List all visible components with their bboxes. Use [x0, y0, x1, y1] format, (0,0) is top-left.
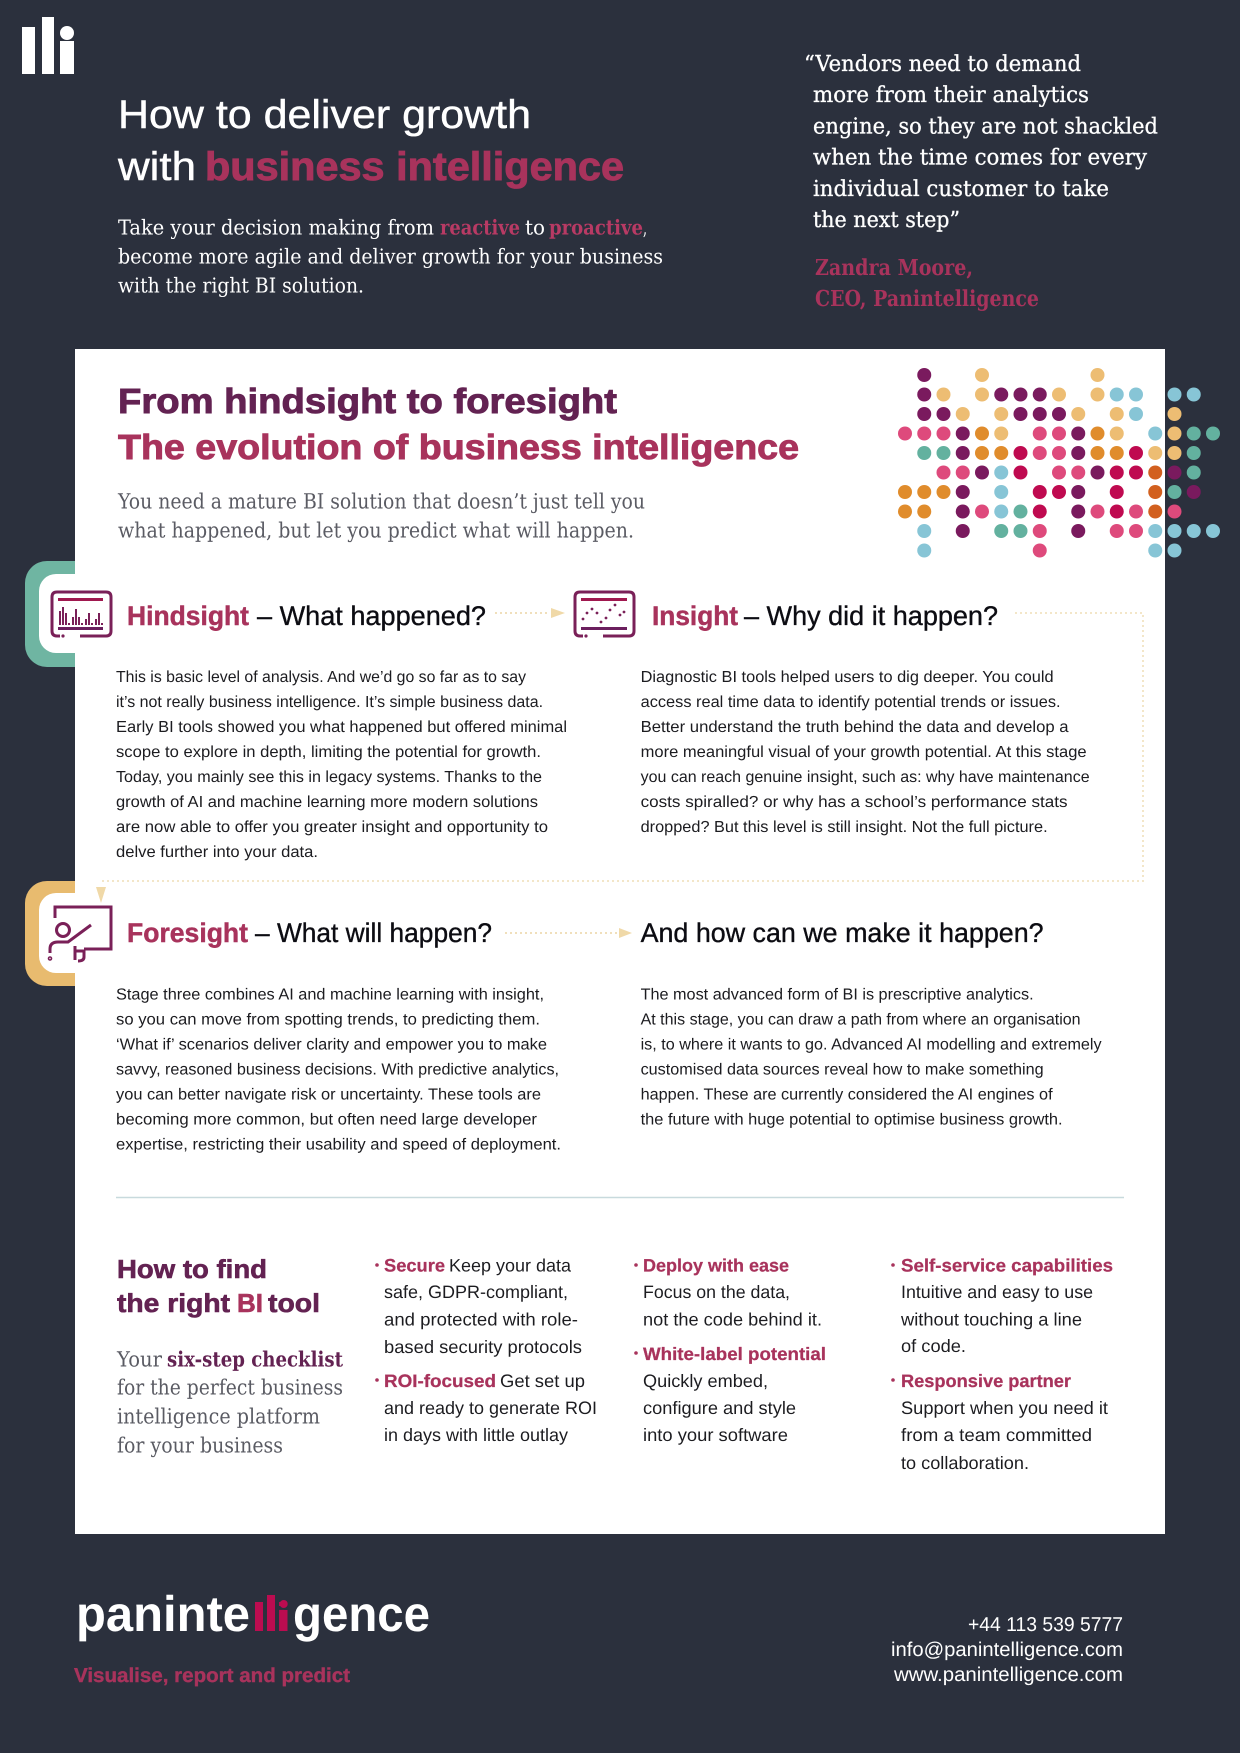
checklist: secure and ROI-focused — [375, 1256, 597, 1445]
tab: yellow foresight — [25, 881, 109, 986]
section intro: You need a mature BI solution that doesn’t just tell you — [117, 490, 645, 514]
icon: foresight presenter at board — [49, 907, 111, 961]
checklist: deploy with ease and white-label: Deploy with ease — [643, 1256, 789, 1276]
heading: hindsight: Hindsight — [127, 601, 249, 631]
text block: prescriptive: is, to where it wants to go. Advanced AI modelling and extremely — [641, 1036, 1102, 1054]
text block: hindsight: This is basic level of analysis. And we’d go so far as to say — [116, 669, 526, 686]
text block: foresight: savvy, reasoned business decisions. With predictive analytics, — [116, 1062, 559, 1078]
checklist: secure and ROI-focused: in days with little outlay — [384, 1425, 568, 1445]
checklist: self-service and responsive partner: Support when you need it — [901, 1398, 1108, 1418]
header intro text: , — [643, 216, 647, 240]
checklist: secure and ROI-focused: Secure — [384, 1256, 445, 1276]
text block: hindsight: it’s not really business intelligence. It’s simple business data. — [116, 694, 543, 711]
pull quote: the next step” — [813, 208, 960, 233]
text block: foresight: Stage three combines AI and machine learning with insight, — [116, 986, 544, 1004]
checklist: self-service and responsive partner: without touching a line — [900, 1310, 1082, 1330]
arrow: foresight to prescriptive — [505, 928, 632, 938]
quote attribution — [815, 255, 1039, 312]
text block: foresight: so you can move from spotting trends, to predicting them. — [116, 1012, 540, 1028]
pull quote: when the time comes for every — [813, 146, 1148, 170]
heading: how to find the right BI tool: the right — [117, 1288, 230, 1318]
checklist intro: six-step checklist — [167, 1346, 343, 1372]
checklist: self-service and responsive partner: Responsive partner — [901, 1371, 1071, 1391]
header intro text: proactive — [549, 216, 643, 240]
header title: with — [117, 145, 196, 189]
footer contact details: www.panintelligence.com — [893, 1664, 1123, 1686]
text block: prescriptive: customised data sources reveal how to make something — [641, 1062, 1044, 1078]
footer logo: panintelligence: paninte — [76, 1586, 250, 1642]
dot matrix graphic — [898, 368, 1220, 558]
text block: prescriptive: the future with huge potential to optimise business growth. — [641, 1112, 1063, 1128]
text block: hindsight: delve further into your data. — [116, 844, 318, 861]
heading: hindsight: – What happened? — [257, 601, 486, 631]
section heading: From hindsight to foresight — [118, 382, 617, 421]
text block: foresight: you can better navigate risk or uncertainty. These tools are — [116, 1086, 541, 1104]
section intro: what happened, but let you predict what will happen. — [118, 518, 634, 542]
header intro text: become more agile and deliver growth for your business — [118, 244, 663, 268]
header intro text — [118, 216, 663, 298]
heading: hindsight — [127, 601, 486, 631]
footer logo: panintelligence: lli — [255, 1596, 287, 1640]
checklist: self-service and responsive partner: to collaboration. — [901, 1453, 1029, 1473]
text block: insight: dropped? But this level is still insight. Not the full picture. — [641, 819, 1048, 836]
checklist: secure and ROI-focused: Get set up — [500, 1371, 585, 1391]
text block: foresight: ‘What if’ scenarios deliver clarity and empower you to make — [116, 1036, 547, 1054]
heading: insight: Insight — [652, 601, 738, 631]
footer logo: panintelligence: gence — [293, 1586, 430, 1642]
text block: insight — [641, 669, 1090, 836]
text block: prescriptive — [641, 986, 1102, 1128]
text block: foresight: expertise, restricting their usability and speed of deployment. — [116, 1136, 561, 1154]
heading: and how can we make it happen: And how can we make it happen? — [641, 918, 1044, 948]
checklist intro: Your — [116, 1348, 163, 1372]
text block: foresight — [116, 986, 561, 1154]
pull quote: more from their analytics — [813, 83, 1089, 108]
text block: hindsight: Today, you mainly see this in legacy systems. Thanks to the — [116, 769, 542, 786]
tab: green hindsight — [25, 561, 109, 667]
checklist intro — [116, 1346, 343, 1458]
quote attribution: CEO, Panintelligence — [815, 286, 1039, 312]
pull quote: individual customer to take — [813, 177, 1109, 202]
header intro text: reactive — [440, 216, 520, 240]
checklist: deploy with ease and white-label: into your software — [643, 1425, 788, 1445]
section heading — [118, 382, 799, 467]
header intro text: Take your decision making from — [118, 216, 434, 240]
heading: foresight: Foresight — [127, 918, 248, 948]
text block: hindsight: growth of AI and machine learning more modern solutions — [116, 794, 538, 811]
checklist intro: intelligence platform — [117, 1404, 320, 1428]
pull quote — [804, 52, 1158, 233]
footer contact details: info@panintelligence.com — [891, 1639, 1123, 1661]
text block: hindsight — [116, 669, 567, 861]
header title — [117, 93, 624, 189]
checklist: self-service and responsive partner: from a team committed — [901, 1425, 1092, 1445]
checklist: secure and ROI-focused: ROI-focused — [384, 1371, 496, 1391]
checklist: deploy with ease and white-label — [634, 1256, 826, 1445]
checklist: secure and ROI-focused: and ready to generate ROI — [384, 1398, 597, 1418]
footer contact details — [891, 1614, 1123, 1686]
icon: insight scatter monitor — [575, 592, 634, 638]
checklist: secure and ROI-focused: based security protocols — [384, 1337, 582, 1357]
section heading: The evolution of business intelligence — [118, 428, 799, 467]
checklist: deploy with ease and white-label: configure and style — [643, 1398, 796, 1418]
text block: insight: Diagnostic BI tools helped users to dig deeper. You could — [641, 669, 1054, 686]
checklist: secure and ROI-focused: safe, GDPR-compliant, — [384, 1282, 568, 1302]
checklist intro: for your business — [117, 1434, 283, 1458]
heading: how to find the right BI tool: BI — [237, 1288, 263, 1318]
footer logo: panintelligence — [76, 1586, 430, 1642]
header title: How to deliver growth — [118, 93, 531, 137]
header intro text: to — [525, 216, 545, 240]
checklist: self-service and responsive partner: Self-service capabilities — [901, 1256, 1113, 1276]
heading: foresight — [127, 918, 492, 948]
arrow: dotted connector from insight to foresight — [96, 613, 1143, 903]
header intro text: with the right BI solution. — [118, 274, 364, 298]
text block: hindsight: are now able to offer you greater insight and opportunity to — [116, 819, 548, 836]
checklist: self-service and responsive partner: Intuitive and easy to use — [901, 1282, 1093, 1302]
text block: insight: more meaningful visual of your growth potential. At this stage — [641, 744, 1087, 761]
pull quote: “Vendors need to demand — [804, 52, 1081, 77]
text block: prescriptive: The most advanced form of BI is prescriptive analytics. — [641, 986, 1034, 1004]
text block: hindsight: Early BI tools showed you what happened but offered minimal — [116, 719, 567, 736]
heading: insight: – Why did it happen? — [744, 601, 998, 631]
checklist: self-service and responsive partner: of code. — [901, 1336, 966, 1356]
arrow: hindsight to insight — [495, 608, 565, 618]
icon: hindsight bar chart monitor — [52, 592, 111, 638]
checklist: deploy with ease and white-label: White-label potential — [643, 1344, 826, 1364]
checklist: deploy with ease and white-label: Quickly embed, — [643, 1371, 768, 1391]
checklist: self-service and responsive partner — [891, 1256, 1113, 1473]
icon: brand mark — [22, 17, 74, 74]
text block: insight: costs spiralled? or why has a school’s performance stats — [641, 794, 1068, 811]
text block: insight: you can reach genuine insight, such as: why have maintenance — [641, 769, 1090, 786]
section intro — [117, 490, 645, 542]
text block: hindsight: scope to explore in depth, limiting the potential for growth. — [116, 744, 541, 761]
text block: insight: Better understand the truth behind the data and develop a — [641, 719, 1069, 736]
checklist: secure and ROI-focused: Keep your data — [449, 1256, 572, 1276]
pull quote: engine, so they are not shackled — [813, 114, 1158, 140]
heading: how to find the right BI tool: tool — [268, 1288, 320, 1318]
text block: insight: access real time data to identify potential trends or issues. — [641, 694, 1061, 711]
checklist: deploy with ease and white-label: Focus on the data, — [643, 1282, 790, 1302]
text block: foresight: becoming more common, but often need large developer — [116, 1112, 538, 1128]
checklist: secure and ROI-focused: and protected with role- — [384, 1310, 578, 1330]
checklist: deploy with ease and white-label: not the code behind it. — [643, 1310, 822, 1330]
panel: white content — [75, 349, 1165, 1534]
header title: business intelligence — [205, 145, 624, 189]
heading: how to find the right BI tool: How to find — [117, 1254, 267, 1284]
footer tagline: Visualise, report and predict — [74, 1665, 350, 1687]
checklist intro: for the perfect business — [117, 1376, 343, 1400]
text block: prescriptive: happen. These are currently considered the AI engines of — [641, 1086, 1053, 1104]
quote attribution: Zandra Moore, — [815, 255, 973, 281]
text block: prescriptive: At this stage, you can draw a path from where an organisation — [641, 1012, 1081, 1028]
heading: how to find the right BI tool — [117, 1254, 320, 1318]
footer contact details: +44 113 539 5777 — [968, 1614, 1123, 1636]
heading: foresight: – What will happen? — [255, 918, 492, 948]
